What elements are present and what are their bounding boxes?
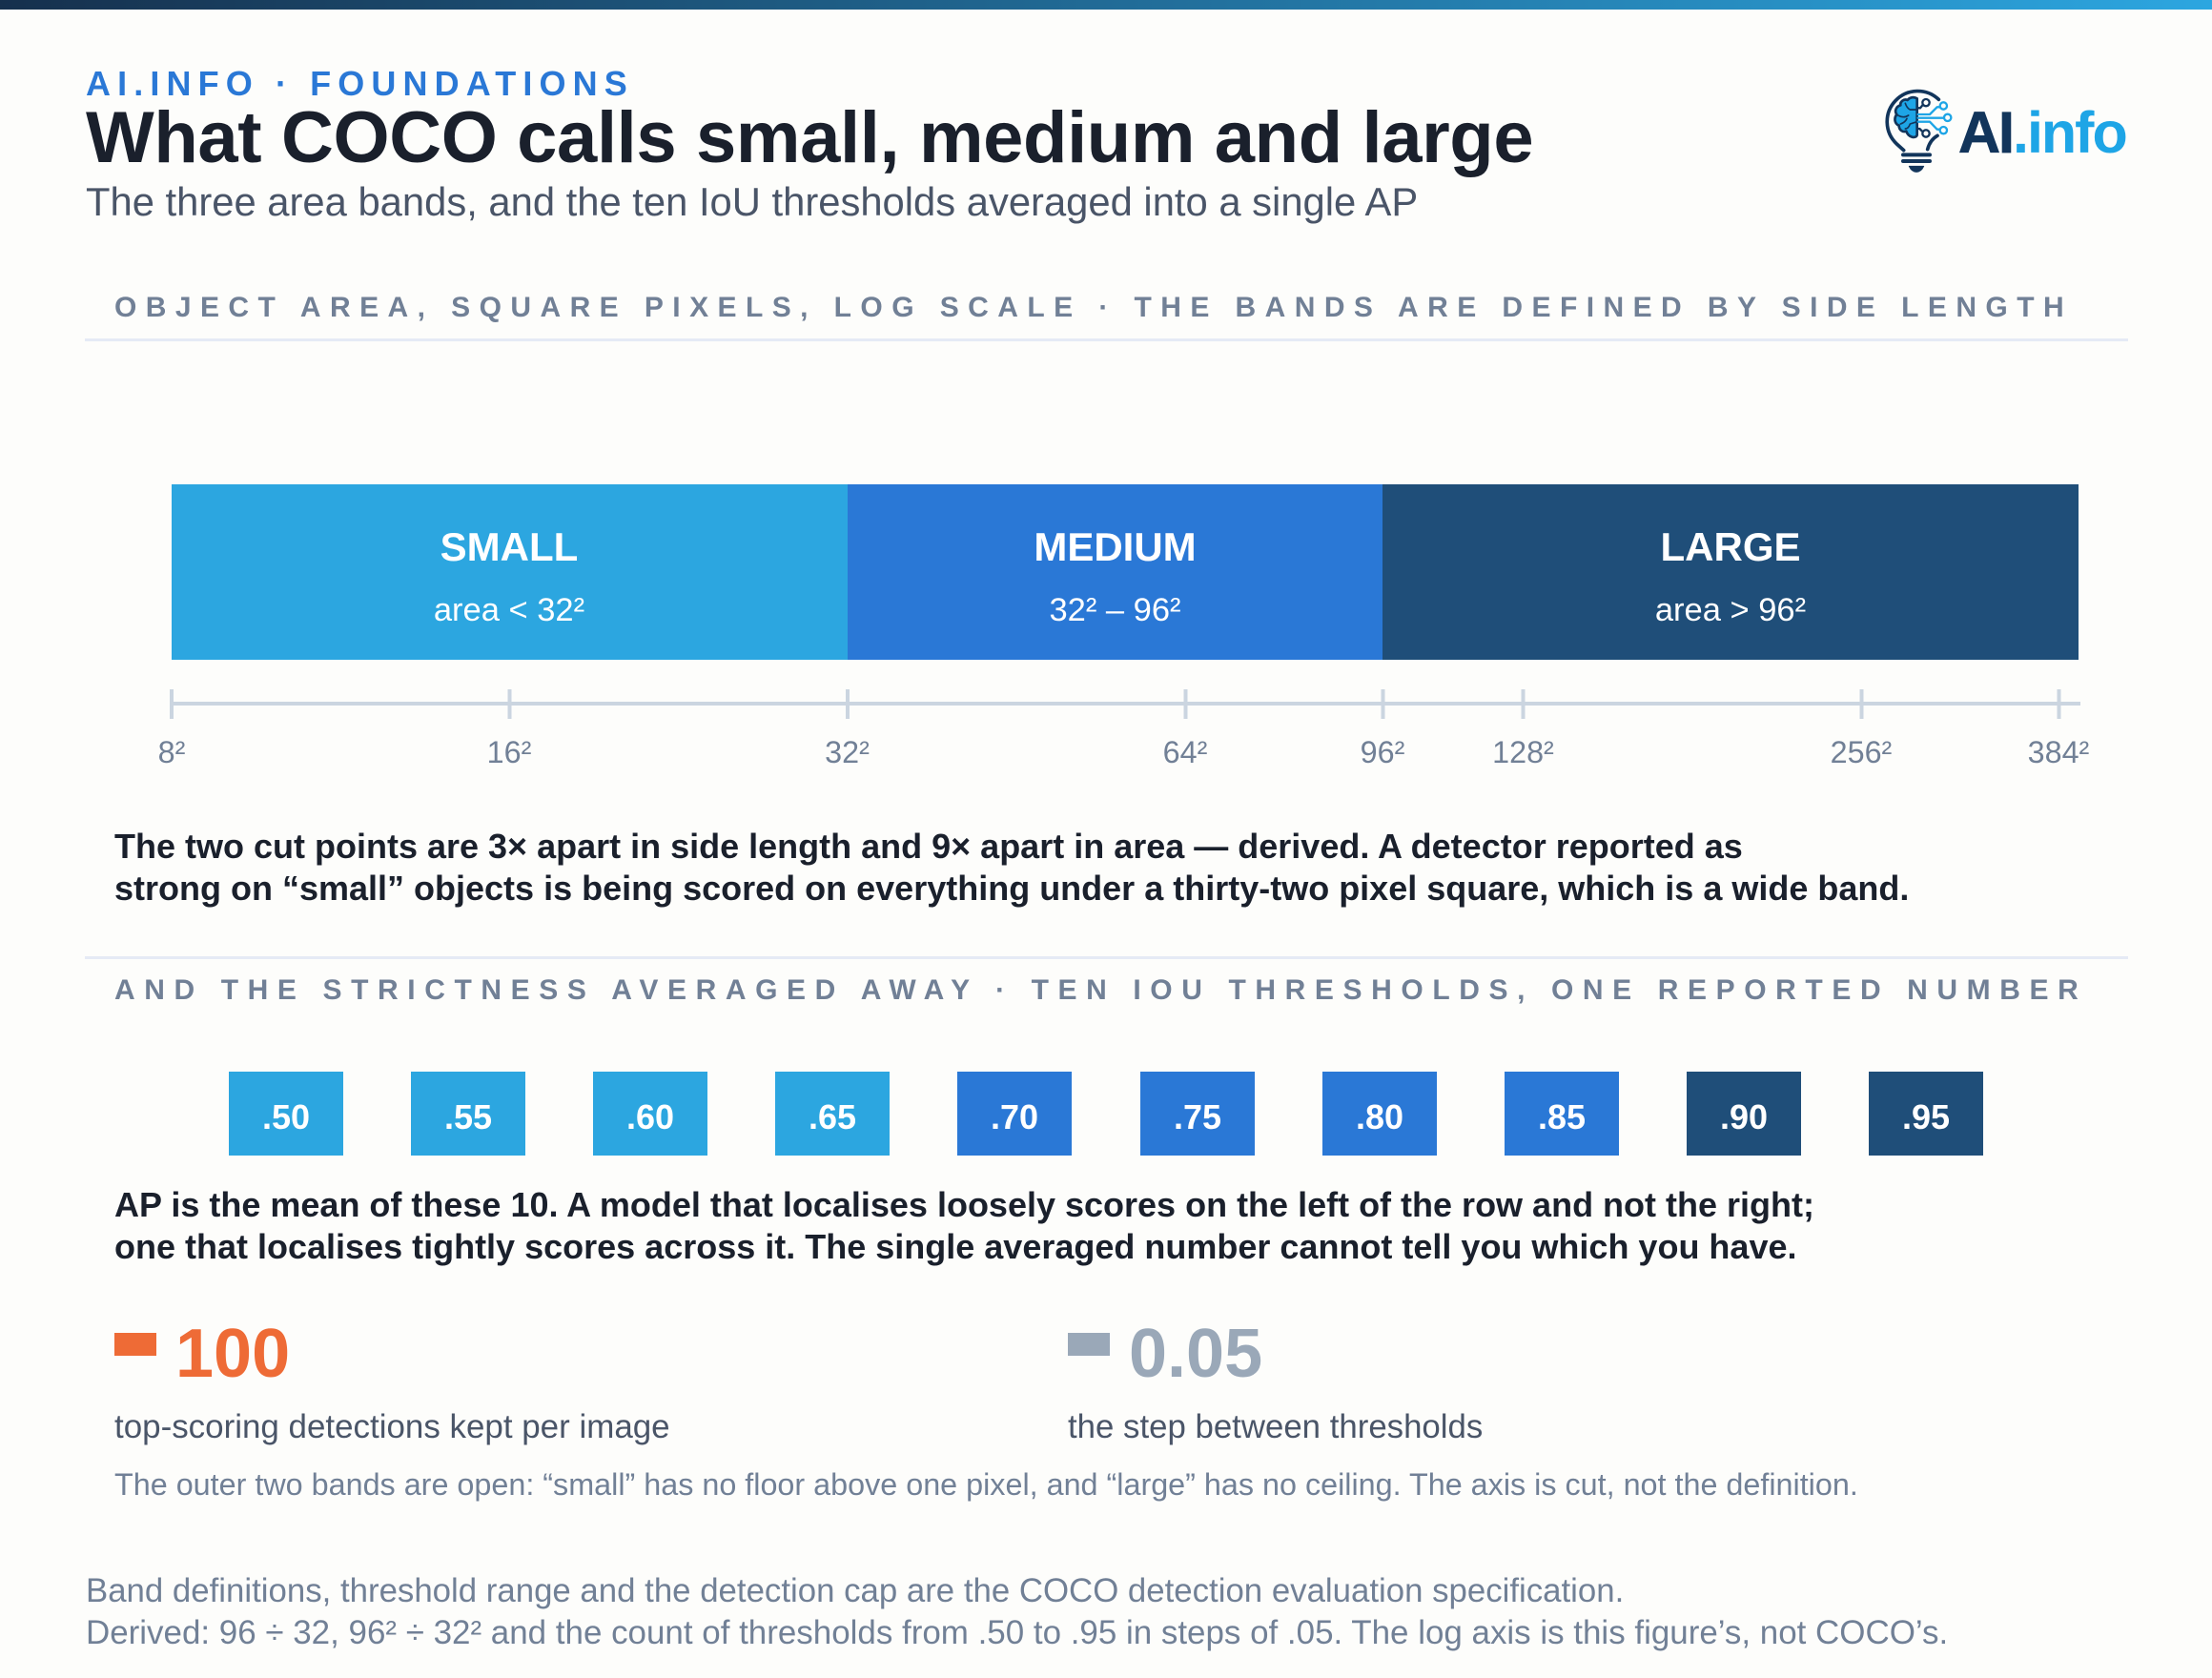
IoU threshold row: .65 [809,1097,856,1136]
band: small: SMALL [440,524,578,569]
title: What COCO calls small, medium and large [86,97,1533,178]
takeaway: cut points: strong on “small” objects is being scored on everything under a thirty-two pixel square, which is a wide band. [114,869,1909,908]
band: medium [848,484,1382,660]
IoU threshold row: .80 [1356,1097,1403,1136]
note: The outer two bands are open: “small” has no floor above one pixel, and “large” has no ceiling. The axis is cut, not the definition. [114,1467,1858,1502]
band: medium: 32² – 96² [1049,592,1181,628]
logo wordmark: AI.info [1958,100,2126,165]
band: medium: MEDIUM [1034,524,1197,569]
IoU threshold row: .60 [626,1097,674,1136]
section heading: object area: OBJECT AREA, SQUARE PIXELS, LOG SCALE · THE BANDS ARE DEFINED BY SIDE LENGTH [114,292,2073,323]
subtitle: The three area bands, and the ten IoU thresholds averaged into a single AP [86,179,1418,224]
takeaway: AP mean [114,1185,1814,1266]
log-scale axis: 64² [1163,735,1208,769]
icon: lightbulb with brain [1887,92,1951,172]
IoU threshold row: .70 [991,1097,1038,1136]
band: large: area > 96² [1655,592,1806,628]
log-scale axis: 32² [825,735,870,769]
log-scale axis [158,689,2090,769]
IoU threshold row: .50 [262,1097,310,1136]
IoU threshold row: .90 [1720,1097,1768,1136]
IoU threshold row: .55 [444,1097,492,1136]
log-scale axis: 256² [1831,735,1893,769]
footer source [86,1572,1948,1651]
footer source: Derived: 96 ÷ 32, 96² ÷ 32² and the count of thresholds from .50 to .95 in steps of .05. The log axis is this figure’s, not COCO’s. [86,1614,1948,1651]
log-scale axis: 16² [487,735,532,769]
stat: 0.05 step [1068,1316,1483,1445]
takeaway: AP mean: AP is the mean of these 10. A model that localises loosely scores on the left of the row and not the right; [114,1185,1814,1224]
band: small [172,484,848,660]
stat: 100 detections: 100 [175,1316,290,1392]
stat: 100 detections: top-scoring detections kept per image [114,1408,670,1445]
band: large: LARGE [1661,524,1800,569]
footer source: Band definitions, threshold range and the detection cap are the COCO detection evaluation specification. [86,1572,1624,1609]
IoU threshold row [229,1072,1983,1156]
band: large [1382,484,2079,660]
takeaway: AP mean: one that localises tightly scores across it. The single averaged number cannot tell you which you have. [114,1227,1796,1266]
IoU threshold row: .85 [1538,1097,1586,1136]
log-scale axis: 128² [1492,735,1554,769]
IoU threshold row: .75 [1174,1097,1221,1136]
band: small: area < 32² [434,592,584,628]
takeaway: cut points [114,827,1909,908]
stat: 0.05 step: 0.05 [1129,1316,1262,1392]
log-scale axis: 8² [158,735,186,769]
logo [1887,92,2126,172]
top accent bar [0,0,2212,10]
section heading: thresholds: AND THE STRICTNESS AVERAGED AWAY · TEN IOU THRESHOLDS, ONE REPORTED NUMBER [114,974,2087,1006]
header [86,64,1533,224]
eyebrow: AI.INFO · FOUNDATIONS [86,64,634,103]
log-scale axis: 384² [2028,735,2090,769]
stat: 100 detections [114,1316,670,1445]
IoU threshold row: .95 [1902,1097,1950,1136]
log-scale axis: 96² [1361,735,1405,769]
area bands chart [172,484,2079,660]
takeaway: cut points: The two cut points are 3× apart in side length and 9× apart in area — derived. A detector reported as [114,827,1743,866]
stat: 0.05 step: the step between thresholds [1068,1408,1483,1445]
